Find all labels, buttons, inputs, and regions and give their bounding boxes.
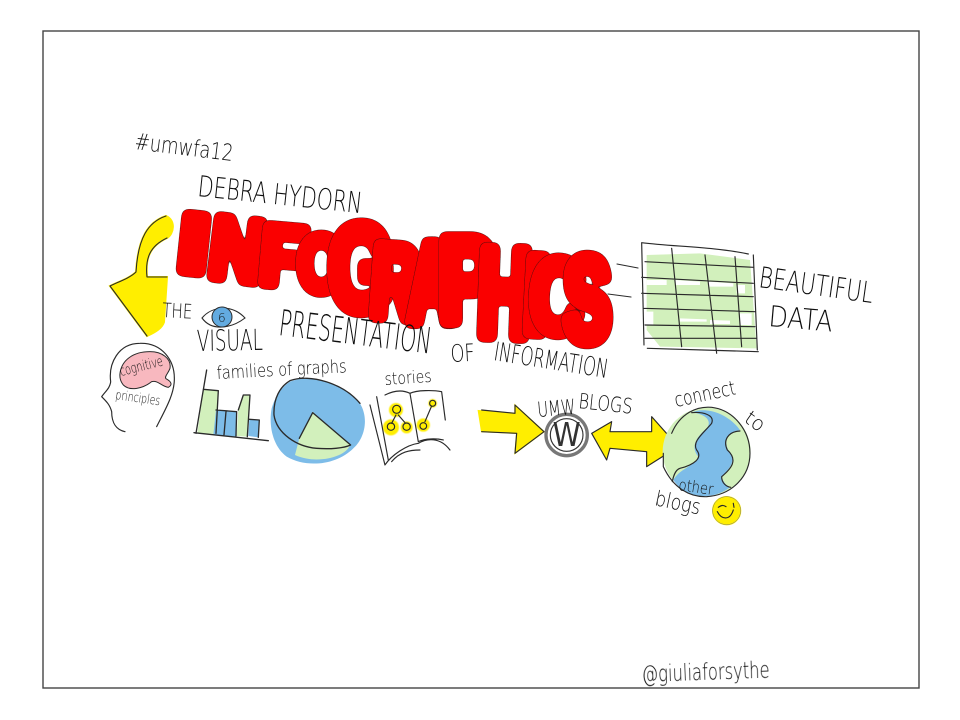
text: speaker name: DEBRA HYDORN (196, 169, 364, 220)
text: blogs: blogs (653, 486, 703, 519)
title: INFOGRAPHICS: I (173, 197, 214, 291)
text: other: other (677, 475, 715, 499)
title: INFOGRAPHICS: P (439, 214, 496, 348)
text: BLOGS: BLOGS (577, 389, 634, 419)
icon: brain (120, 352, 171, 389)
text: OF: OF (450, 339, 475, 368)
text: to: to (740, 405, 770, 437)
text: stories: stories (384, 367, 432, 390)
icon: double arrow (592, 417, 678, 467)
text: INFORMATION: INFORMATION (492, 337, 610, 385)
title: INFOGRAPHICS: C (528, 238, 586, 357)
text: THE: THE (162, 298, 193, 324)
text: connect: connect (672, 376, 738, 412)
pie chart (271, 378, 365, 464)
title: INFOGRAPHICS: N (205, 199, 269, 302)
bar chart (194, 370, 268, 441)
icon: yellow curved arrow (110, 216, 173, 336)
sketch content (102, 129, 876, 688)
icon: globe (663, 407, 751, 497)
icon: eye (202, 307, 245, 327)
text: UMW: UMW (536, 395, 576, 422)
book with story diagram (370, 391, 450, 465)
arrow outline (110, 216, 167, 336)
text: cognitive: cognitive (118, 354, 165, 380)
text: principles: principles (114, 388, 161, 409)
icon: smiley (712, 496, 741, 525)
icon: arrow into UMW Blogs (478, 405, 544, 453)
text: VISUAL: VISUAL (197, 323, 263, 358)
icon: wordpress logo: W (553, 415, 581, 454)
title: INFOGRAPHICS: R (367, 223, 423, 342)
graphic: blogs and globe (478, 405, 751, 525)
title: INFOGRAPHICS: H (476, 222, 533, 364)
text: BEAUTIFUL: BEAUTIFUL (757, 260, 876, 310)
title: INFOGRAPHICS: I (521, 234, 552, 357)
text: families of graphs: families of graphs (216, 356, 347, 384)
title: INFOGRAPHICS: F (256, 207, 310, 305)
text: signature: @giuliaforsythe (641, 658, 770, 688)
chart: bars and pie (194, 370, 450, 465)
table: beautiful data (642, 243, 758, 353)
panel: head with brain (102, 343, 174, 432)
title: INFOGRAPHICS (173, 197, 611, 367)
icon: eye: 6 (218, 311, 226, 325)
title: INFOGRAPHICS: S (564, 232, 611, 367)
text: DATA: DATA (767, 299, 834, 339)
text: hashtag: #umwfa12 (133, 129, 235, 167)
title: INFOGRAPHICS: G (329, 201, 393, 337)
title: INFOGRAPHICS: O (298, 219, 345, 308)
title: INFOGRAPHICS: A (408, 219, 456, 346)
connector lines to table (608, 264, 638, 297)
text: PRESENTATION: PRESENTATION (277, 303, 434, 363)
